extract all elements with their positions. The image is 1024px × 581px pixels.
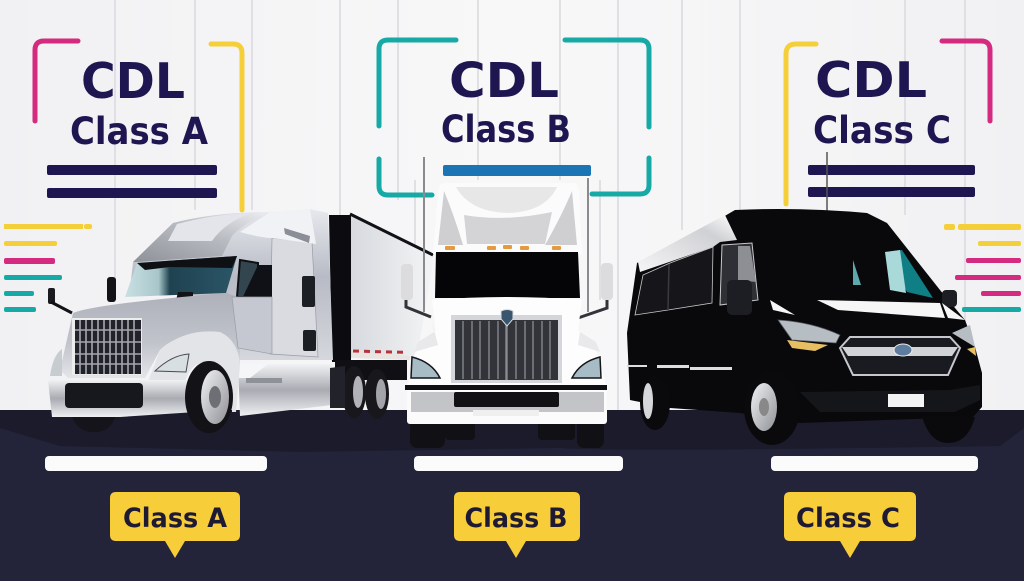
left mirrors [48,277,193,324]
title: CDL [449,53,559,109]
label: Class C: Class C [796,503,900,534]
rear wheels [342,366,389,419]
vehicle: Class C van [627,152,982,445]
label: Class A [110,492,240,558]
underline bar [443,165,591,176]
cab body [130,209,333,360]
mirrors [401,263,613,318]
antennas [424,157,588,312]
title: CDL [81,53,185,110]
title: CDL [815,52,927,109]
antenna [826,152,828,222]
subtitle: Class A [70,110,208,153]
bracket: teal [379,40,649,195]
windshield [435,252,580,298]
roof fairing [433,183,582,254]
bracket: magenta [942,41,990,121]
badge [501,310,513,326]
sleeper panel [270,238,318,357]
panel: CDL Class C heading [786,41,990,204]
bracket: yellow [211,44,242,210]
subtitle: Class B [441,108,571,151]
wheels [640,371,975,445]
side stripes [627,365,732,370]
bracket: magenta [35,41,78,121]
door window [237,260,258,297]
grille [840,337,960,375]
white roof band [638,215,737,272]
side mirror [727,280,752,315]
underline bars [808,165,975,197]
right color stripes [944,224,1021,312]
subtitle: Class C [813,109,951,152]
trailer [329,214,433,380]
headlights [411,357,601,378]
windshield glass [853,250,933,298]
visor lights [445,245,561,250]
rear wheel well [330,366,345,408]
wheels [410,420,604,448]
hood highlights [770,300,965,320]
windshield [125,256,237,297]
door window [720,243,758,305]
left headlight [50,349,62,376]
label: Class A: Class A [123,503,227,534]
road shadow [0,410,1024,452]
bumper [405,385,607,424]
roof fairing [133,212,270,262]
road bar: Class C [771,456,978,471]
side door [232,297,272,354]
vehicle: Class A semi truck [48,209,433,433]
underline bars [47,165,217,198]
hood [407,297,607,387]
headlight [155,354,189,372]
fender [148,331,240,412]
label: Class C [784,492,916,558]
road bar: Class A [45,456,267,471]
panel: CDL Class B heading [379,40,649,195]
bumper [48,380,198,417]
grille [72,318,142,375]
side step [238,364,332,416]
side windows [635,247,713,315]
hood [60,293,240,378]
van body [627,209,982,423]
license plate [888,394,924,407]
side mirror [195,265,272,311]
lower bumper [800,385,980,412]
left color stripes [4,224,92,312]
road [0,410,1024,581]
wheels [72,361,233,433]
road bar: Class B [414,456,623,471]
sleeper windows [262,276,316,351]
label: Class B [454,492,580,558]
label: Class B: Class B [464,503,568,534]
vehicle: Class B truck front [401,157,613,448]
panel: CDL Class A heading [35,41,242,210]
grille [451,315,562,383]
bracket: yellow [786,44,816,204]
headlights [778,320,976,356]
